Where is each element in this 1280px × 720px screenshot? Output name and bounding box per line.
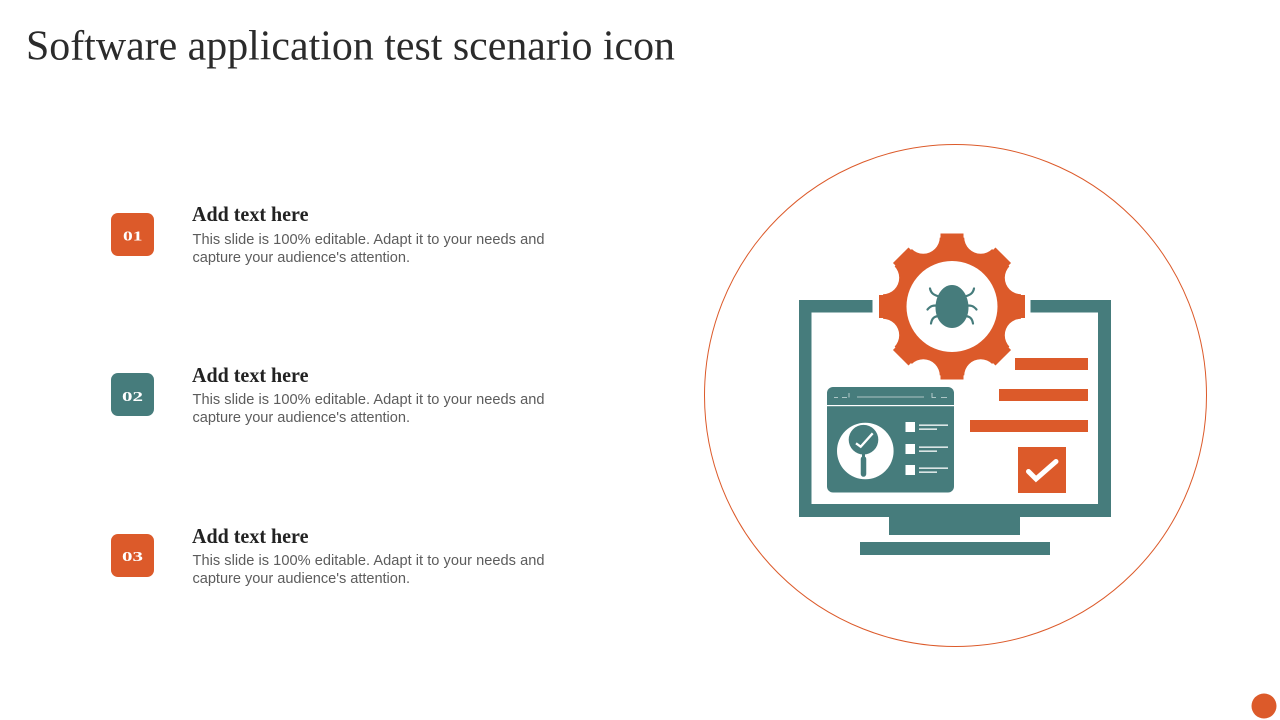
badge 01 xyxy=(111,213,154,256)
icon: gear with bug xyxy=(861,216,1043,397)
icon: bug xyxy=(928,285,976,328)
badge 03: 03 xyxy=(122,550,143,565)
body text 03 xyxy=(192,553,544,587)
body text 02: capture your audience's attention. xyxy=(192,410,410,426)
browser window panel xyxy=(827,387,954,492)
icon: orange checkbox xyxy=(1018,447,1066,493)
orange text bars xyxy=(970,358,1088,432)
body text 03: This slide is 100% editable. Adapt it to your needs and xyxy=(192,553,544,569)
body text 03: capture your audience's attention. xyxy=(192,571,410,587)
body text 02 xyxy=(192,392,544,426)
title: Software application test scenario icon xyxy=(26,24,675,70)
item 03 xyxy=(111,524,544,587)
badge 03 xyxy=(111,534,154,577)
body text 01 xyxy=(192,232,544,266)
icon: magnifier with check xyxy=(837,423,894,479)
badge 02 xyxy=(111,373,154,416)
badge 02: 02 xyxy=(122,390,143,405)
heading 02: Add text here xyxy=(192,363,308,387)
item 01 xyxy=(111,202,544,266)
circle outline xyxy=(704,144,1206,646)
corner dot xyxy=(1252,694,1276,718)
icon: monitor xyxy=(799,300,1111,555)
heading 03: Add text here xyxy=(192,524,308,548)
checklist xyxy=(906,422,948,475)
body text 02: This slide is 100% editable. Adapt it to your needs and xyxy=(192,392,544,408)
badge 01: 01 xyxy=(123,230,142,244)
body text 01: capture your audience's attention. xyxy=(192,250,410,266)
heading 01: Add text here xyxy=(192,202,308,226)
item 02 xyxy=(111,363,544,426)
body text 01: This slide is 100% editable. Adapt it to your needs and xyxy=(192,232,544,248)
